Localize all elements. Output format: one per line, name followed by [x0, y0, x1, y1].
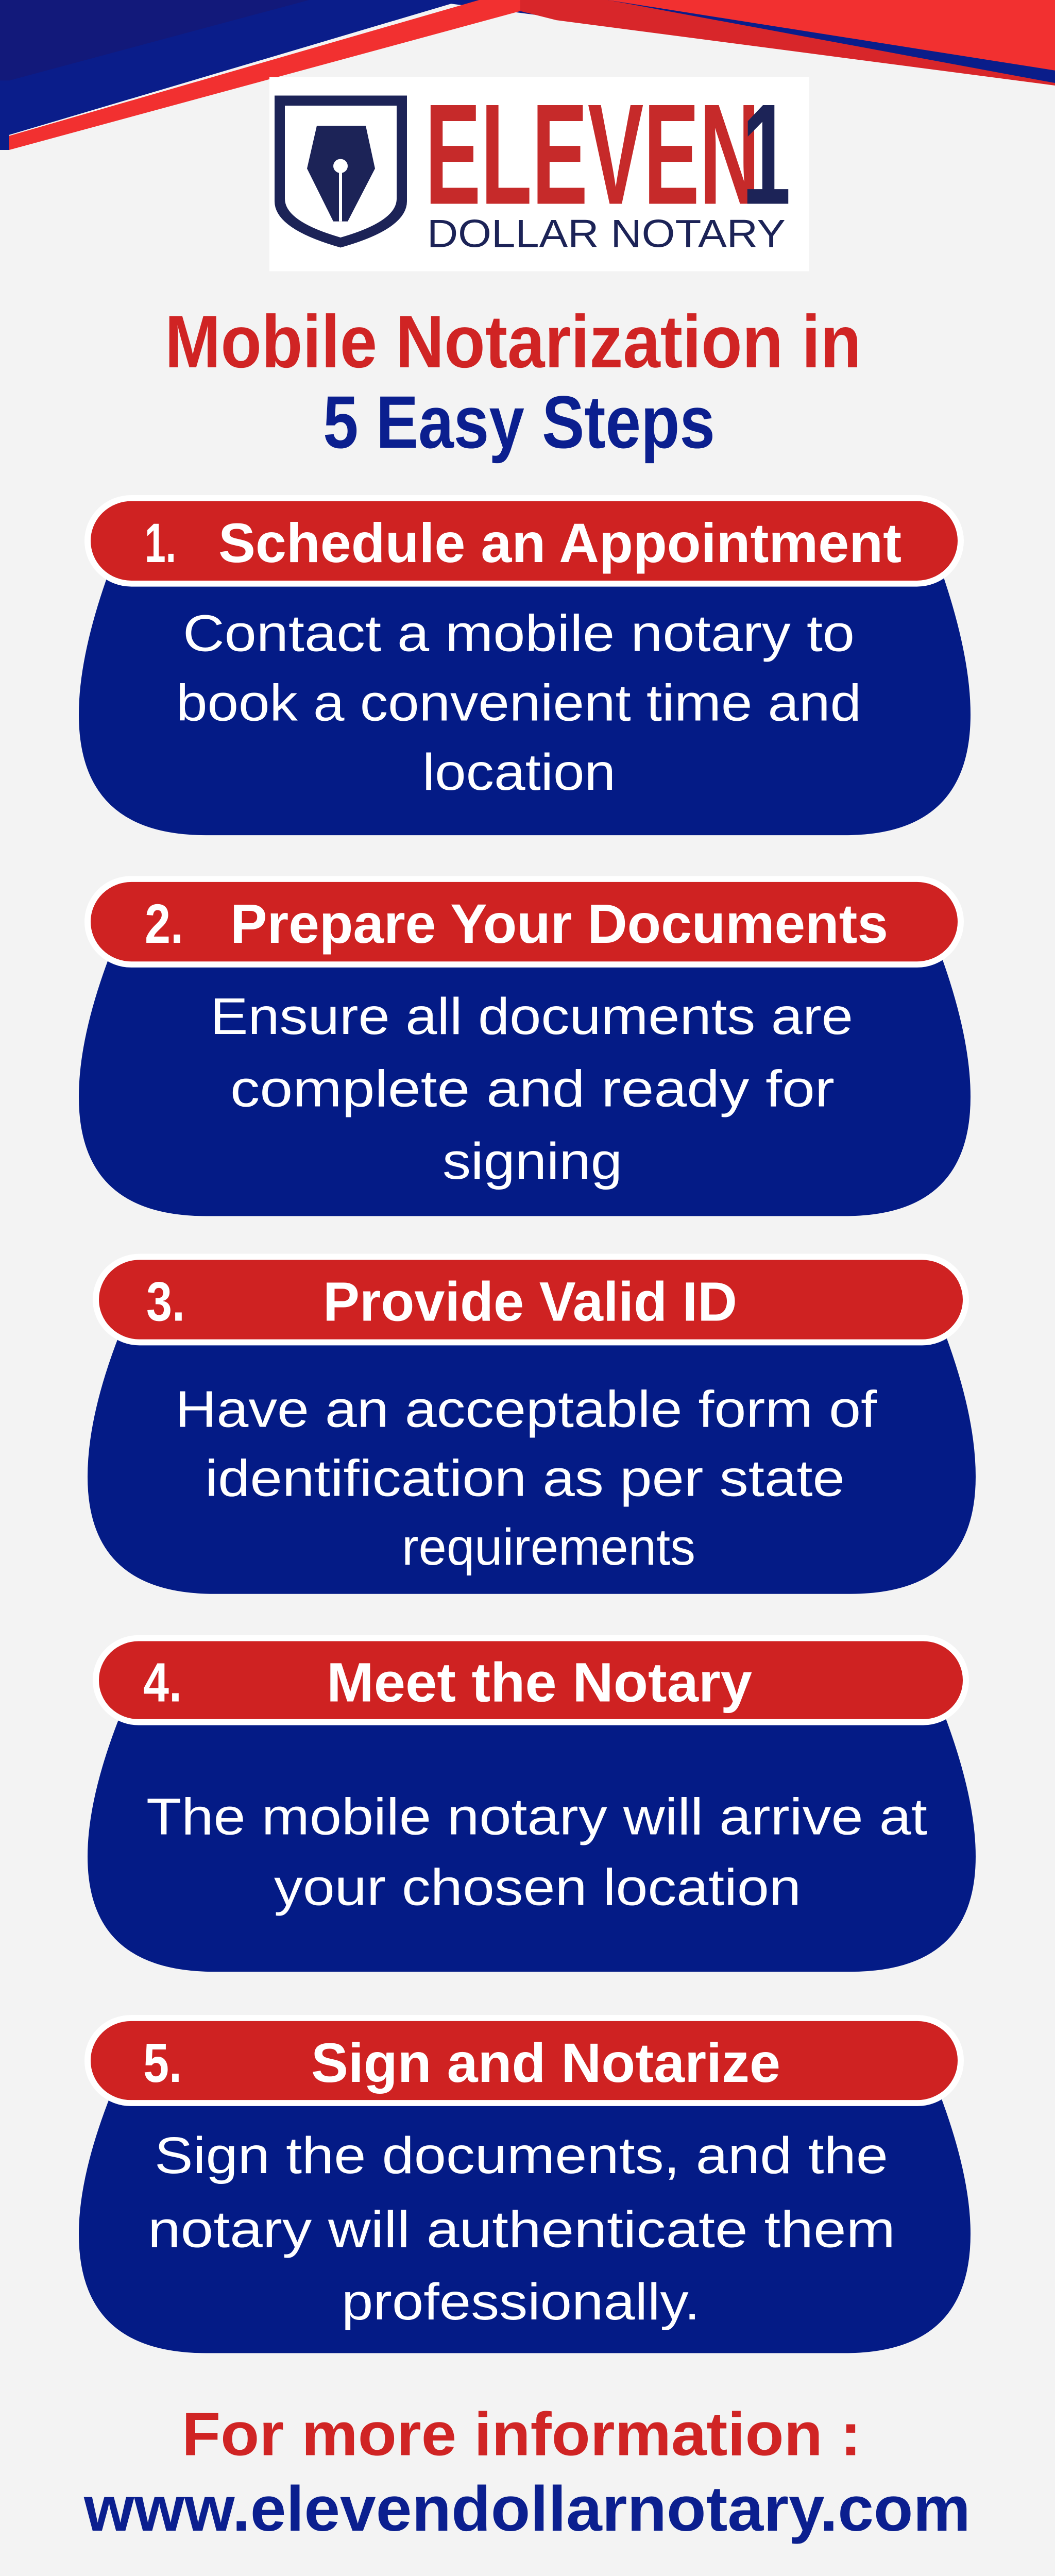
step 4 body: The mobile notary will arrive at — [146, 1788, 927, 1845]
step 3 header pill — [96, 1257, 966, 1342]
footer: contact info: For more information : — [182, 2400, 861, 2468]
step 5 body — [79, 2095, 971, 2353]
step 4 body: your chosen location — [274, 1858, 801, 1916]
footer: contact info — [83, 2400, 971, 2545]
step 3 body: identification as per state — [205, 1449, 845, 1507]
logo: 1 — [742, 74, 791, 234]
logo: DOLLAR NOTARY — [427, 212, 786, 256]
step 2 header pill: 2. — [145, 893, 183, 955]
step 1 — [79, 498, 971, 835]
title: Mobile Notarization in — [165, 300, 861, 383]
step 1 body: Contact a mobile notary to — [183, 604, 855, 662]
step 4 header pill — [96, 1638, 966, 1722]
icon: shield with pen nib — [275, 96, 407, 247]
step 1 header pill: Schedule an Appointment — [218, 513, 901, 574]
step 1 body: location — [422, 743, 616, 801]
step 5 body: Sign the documents, and the — [155, 2126, 888, 2184]
step 5 body: professionally. — [342, 2273, 700, 2331]
step 1 body: book a convenient time and — [176, 674, 861, 732]
step 1 header pill — [88, 498, 961, 584]
step 3 body: requirements — [402, 1518, 695, 1576]
step 4 — [88, 1638, 976, 1972]
title: 5 Easy Steps — [323, 381, 715, 464]
step 2 header pill — [88, 879, 961, 964]
step 2 — [79, 879, 971, 1216]
step 3 body — [88, 1334, 976, 1594]
step 3 header pill: Provide Valid ID — [323, 1272, 737, 1333]
title — [165, 300, 861, 464]
step 5 — [79, 2018, 971, 2353]
top banner — [0, 0, 1055, 150]
step 4 header pill: Meet the Notary — [327, 1652, 752, 1714]
logo wordmark: ELEVEN — [425, 74, 760, 234]
step 2 body: complete and ready for — [230, 1060, 835, 1117]
step 3 — [88, 1257, 976, 1594]
logo — [269, 74, 809, 271]
step 1 header pill: 1. — [145, 513, 176, 574]
step 2 body: signing — [443, 1132, 622, 1190]
step 2 body — [79, 953, 971, 1216]
footer: contact info: www.elevendollarnotary.com — [83, 2473, 971, 2545]
step 4 header pill: 4. — [143, 1652, 182, 1714]
step 3 body: Have an acceptable form of — [175, 1380, 877, 1438]
step 4 body — [88, 1717, 976, 1972]
step 5 header pill: Sign and Notarize — [311, 2032, 780, 2094]
step 5 header pill: 5. — [143, 2032, 182, 2094]
step 2 header pill: Prepare Your Documents — [230, 893, 888, 955]
step 2 body: Ensure all documents are — [210, 987, 853, 1045]
step 3 header pill: 3. — [146, 1272, 185, 1333]
step 5 header pill — [88, 2018, 961, 2103]
step 1 body — [79, 567, 971, 835]
step 5 body: notary will authenticate them — [148, 2200, 895, 2258]
